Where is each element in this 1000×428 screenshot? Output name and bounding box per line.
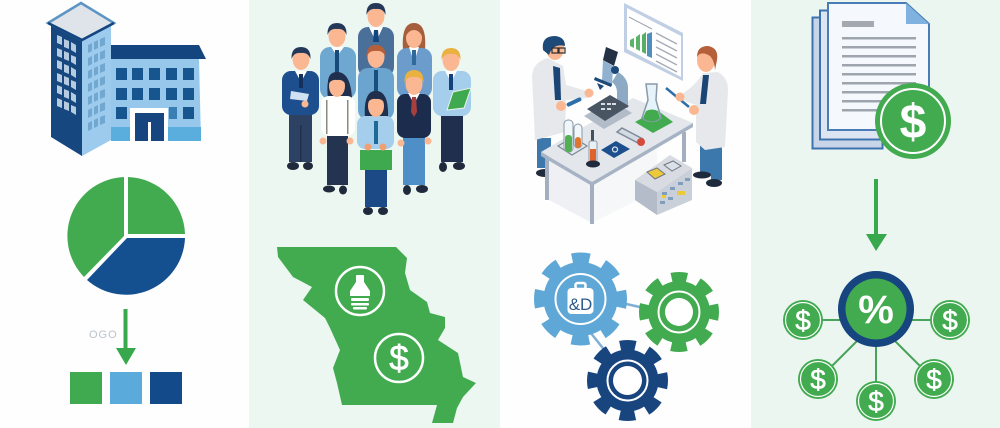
panel: building and ownership [0, 0, 249, 428]
coin: bottom: $ [868, 386, 884, 417]
flask on green mat [635, 84, 673, 133]
lab bench [541, 98, 693, 224]
arrow [866, 179, 887, 251]
coin: right: $ [942, 305, 958, 336]
person: front right [397, 70, 432, 195]
icon: large dollar coin [875, 83, 951, 159]
panel: documents and distribution [751, 0, 1000, 428]
thermometer and slide [601, 128, 645, 158]
person: front left woman [320, 72, 355, 194]
coin: lower right: $ [926, 364, 942, 395]
three colour squares [70, 372, 182, 404]
panel: research and development [500, 0, 751, 428]
coin: lower left [798, 359, 838, 399]
gear: navy [593, 346, 662, 415]
percent hub: % [858, 288, 894, 332]
pie chart [67, 177, 185, 295]
coin: left: $ [795, 305, 811, 336]
coin: lower right [914, 359, 954, 399]
person: far left [282, 47, 319, 170]
coin: right [930, 300, 970, 340]
coin: bottom [856, 381, 896, 421]
scientist: right [666, 46, 728, 187]
panel: people and state [249, 0, 500, 428]
person: far right [433, 48, 471, 172]
icon: large dollar coin: $ [900, 96, 927, 149]
icon: dollar [375, 334, 423, 382]
person: back centre [358, 3, 394, 77]
microscope [584, 47, 632, 129]
person: back right [397, 23, 432, 98]
icon: office building [48, 3, 206, 156]
connector lines between gears [590, 303, 644, 352]
coin: left [783, 300, 823, 340]
person: back left [320, 23, 356, 99]
person: middle centre [358, 45, 394, 120]
test tubes [558, 120, 600, 168]
map: Missouri [277, 247, 476, 423]
scientist: left [532, 36, 594, 177]
control box [635, 155, 692, 215]
faint logo text: OGO [89, 329, 118, 341]
icon: document stack [812, 3, 951, 159]
percent hub [838, 271, 914, 347]
coin: lower left: $ [810, 364, 826, 395]
arrow [116, 309, 136, 365]
gear: R&D blue [540, 259, 620, 339]
gear: green [645, 278, 713, 346]
group of people [282, 3, 471, 215]
icon: bottle [336, 267, 384, 315]
wall chart [624, 3, 683, 81]
person: front centre with green folder [357, 91, 394, 215]
icon: dollar: $ [389, 339, 409, 378]
network of dollar coins around percent [783, 271, 970, 421]
icon: padlock with text: &D [569, 295, 592, 314]
